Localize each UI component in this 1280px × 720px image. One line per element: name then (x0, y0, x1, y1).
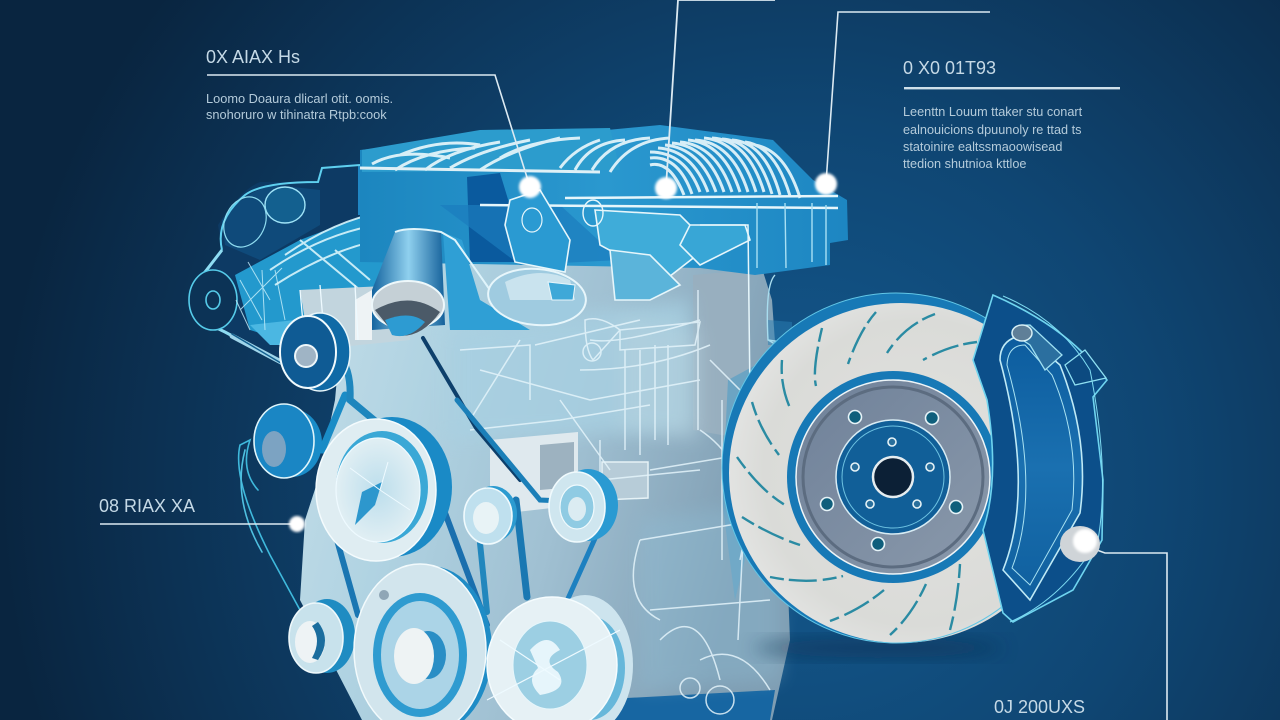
pulley: large lower (354, 564, 492, 720)
callout: upper right (826, 12, 1120, 183)
pulley: alternator (487, 595, 633, 720)
rotor (722, 293, 1073, 643)
caliper (973, 295, 1107, 622)
hub flange (787, 371, 999, 583)
callout heading: 0X AIAX Hs (206, 47, 300, 67)
callout body text: ealnouicions dpuunoly re ttad ts (903, 123, 1081, 137)
callout body text: Leenttn Louum ttaker stu conart (903, 105, 1083, 119)
callout heading: 08 RIAX XA (99, 496, 195, 516)
callout: lower right (994, 545, 1167, 720)
callout body text: Loomo Doaura dlicarl otit. oomis. (206, 91, 393, 106)
callout: top centre leader (666, 0, 775, 187)
marker dots (289, 173, 1100, 562)
drive belts (232, 334, 612, 625)
brake disc (722, 293, 1107, 658)
callout body text: statoinire ealtssmaoowisead (903, 140, 1062, 154)
bolt holes (820, 410, 962, 550)
block wireframe lines (460, 290, 770, 714)
cooling fins (372, 138, 800, 198)
pulley: upper dark (280, 313, 350, 391)
rotor slots (737, 312, 977, 635)
pulley: large upper (316, 417, 452, 561)
crank lobe (486, 265, 588, 329)
leader line (207, 75, 530, 187)
callout body text: ttedion shutnioa kttloe (903, 157, 1026, 171)
leader line (1083, 545, 1167, 720)
right leader line (826, 12, 990, 183)
callout heading: 0 X0 01T93 (903, 58, 996, 78)
callout heading: 0J 200UXS (994, 697, 1085, 717)
heading rule (904, 87, 1120, 89)
pulley: idler centre (464, 486, 517, 544)
left auxiliary housing (189, 160, 450, 372)
valve cover (360, 125, 848, 395)
callout: upper left (206, 47, 530, 187)
engine assembly (189, 125, 848, 720)
pulley: idler right (549, 469, 618, 542)
pulley: small left (254, 404, 322, 478)
pulley: lower left (289, 599, 355, 673)
callout body text: snohoruro w tihinatra Rtpb:cook (206, 107, 387, 122)
oil filler cylinder (372, 229, 530, 336)
leader line (100, 523, 297, 525)
engine block body (300, 262, 792, 720)
stud holes (851, 438, 934, 508)
